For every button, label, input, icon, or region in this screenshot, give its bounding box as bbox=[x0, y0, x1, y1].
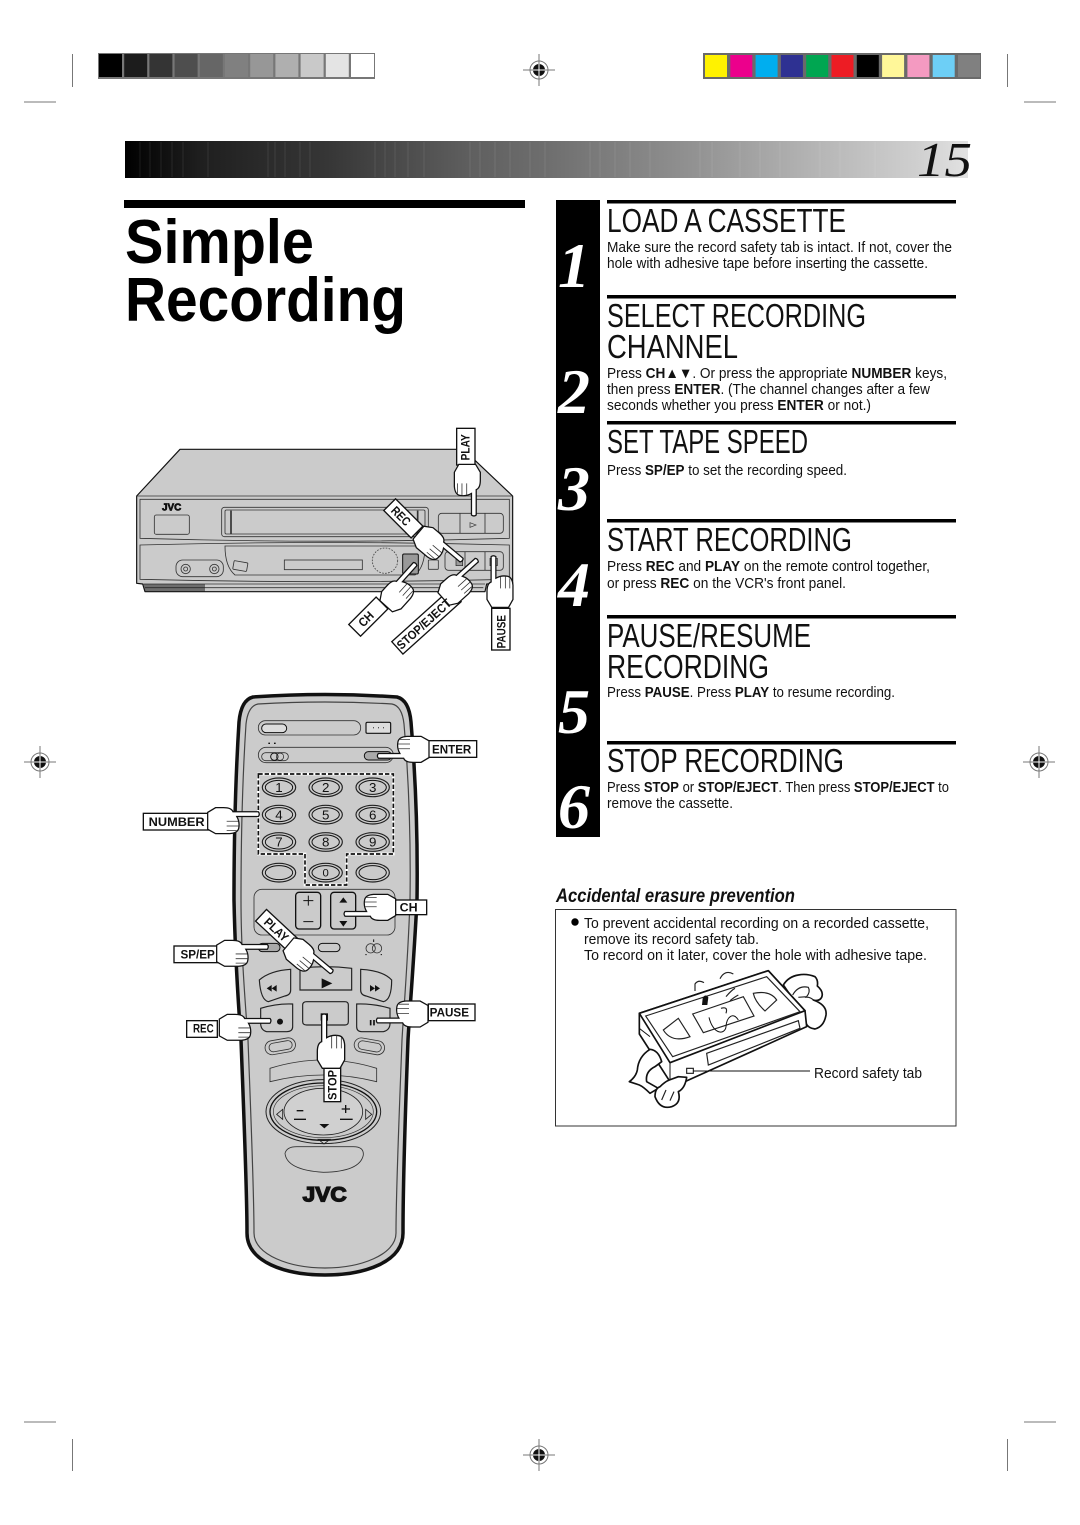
numeric keypad: 8 bbox=[322, 835, 329, 850]
remote lower controls bbox=[187, 1001, 475, 1207]
registration mark: left bbox=[24, 746, 56, 778]
colour calibration bar bbox=[703, 53, 981, 79]
label: CH bbox=[344, 894, 427, 920]
step 5: pause/resume recording: Press PAUSE. Press PLAY to resume recording. bbox=[607, 685, 895, 701]
step 2: select recording channel: CHANNEL bbox=[607, 328, 738, 365]
VCR body: JVC bbox=[162, 503, 181, 514]
step 4: start recording: or press REC on the VCR's front panel. bbox=[607, 576, 846, 592]
numeric keypad: 1 bbox=[275, 780, 283, 795]
label: STOP/EJECT (VCR): STOP/EJECT bbox=[394, 596, 454, 652]
label: NUMBER: NUMBER bbox=[149, 815, 205, 829]
dashed keypad outline bbox=[258, 774, 393, 885]
note text: remove its record safety tab. bbox=[584, 932, 759, 948]
numeric keypad: 7 bbox=[275, 835, 283, 850]
label: ENTER bbox=[377, 736, 477, 762]
note text: To prevent accidental recording on a recorded cassette, bbox=[584, 916, 929, 932]
step numbers: 3 bbox=[557, 453, 590, 524]
step 3: set tape speed: SET TAPE SPEED bbox=[607, 423, 808, 460]
step numbers: 2 bbox=[557, 356, 590, 427]
VCR body bbox=[137, 449, 513, 592]
numeric keypad: 4 bbox=[275, 807, 283, 822]
numeric keypad: 0 bbox=[323, 868, 329, 880]
label: record safety tab: Record safety tab bbox=[814, 1066, 922, 1082]
numeric keypad bbox=[262, 778, 389, 882]
remote hand labels bbox=[143, 736, 477, 987]
registration mark: bottom bbox=[523, 1439, 555, 1471]
step 1: load a cassette: Make sure the record safety tab is intact. If not, cover the bbox=[607, 240, 952, 256]
JVC logo: JVC bbox=[303, 1183, 347, 1207]
label: PAUSE (VCR) bbox=[487, 556, 513, 650]
label: REC (VCR): REC bbox=[388, 504, 413, 529]
step 2: select recording channel: SELECT RECORDING bbox=[607, 297, 866, 334]
illustration: cartoon cassette bbox=[629, 971, 826, 1107]
step 5: pause/resume recording bbox=[607, 615, 956, 701]
label: PLAY (remote) bbox=[256, 909, 336, 987]
step 4: start recording bbox=[607, 519, 956, 592]
label: PAUSE (VCR): PAUSE bbox=[495, 615, 509, 648]
note text bbox=[571, 916, 929, 964]
label: PLAY (remote): PLAY bbox=[261, 915, 292, 945]
header gradient bar bbox=[125, 141, 968, 178]
step 1: load a cassette: hole with adhesive tape before inserting the cassette. bbox=[607, 256, 928, 272]
label: ENTER: ENTER bbox=[432, 742, 471, 756]
step numbers: 1 bbox=[558, 230, 590, 301]
page number: 15 bbox=[917, 132, 972, 187]
record safety tab leader bbox=[693, 1069, 810, 1072]
label: REC (remote) bbox=[187, 1014, 271, 1040]
step numbers: 5 bbox=[558, 676, 590, 747]
label: PAUSE (remote) bbox=[376, 1001, 475, 1027]
step 6: stop recording bbox=[607, 741, 956, 812]
panel: accidental erasure prevention bbox=[556, 910, 956, 1126]
step 6: stop recording: Press STOP or STOP/EJECT. Then press STOP/EJECT to bbox=[607, 780, 949, 796]
step numbers: 4 bbox=[557, 549, 590, 620]
step 2: select recording channel: seconds whether you press ENTER or not.) bbox=[607, 398, 871, 414]
label: STOP/EJECT (VCR) bbox=[392, 555, 491, 654]
numeric keypad: 3 bbox=[369, 780, 376, 795]
label: REC (VCR) bbox=[384, 499, 466, 576]
label: REC (remote): REC bbox=[193, 1022, 214, 1036]
step 1: load a cassette bbox=[607, 200, 956, 272]
direction pad bbox=[266, 1080, 381, 1144]
title bbox=[125, 208, 406, 335]
step 1: load a cassette: LOAD A CASSETTE bbox=[607, 202, 846, 239]
label: CH (VCR): CH bbox=[356, 609, 377, 630]
step 4: start recording: START RECORDING bbox=[607, 521, 852, 558]
step numbers bbox=[557, 230, 590, 842]
remote body bbox=[234, 694, 417, 1275]
label: PLAY (VCR): PLAY bbox=[458, 434, 472, 460]
label: SP/EP bbox=[174, 940, 268, 966]
numeric keypad: 9 bbox=[369, 835, 376, 850]
title: Simple bbox=[125, 208, 314, 277]
step 3: set tape speed: Press SP/EP to set the recording speed. bbox=[607, 463, 847, 479]
note text: To record on it later, cover the hole with adhesive tape. bbox=[584, 948, 927, 964]
illustration: remote control bbox=[143, 694, 477, 1275]
step 2: select recording channel: Press CH▲▼. Or press the appropriate NUMBER keys, bbox=[607, 366, 947, 382]
label: NUMBER bbox=[143, 808, 259, 834]
illustration: VCR with pointing hands bbox=[137, 428, 513, 654]
step 2: select recording channel: then press ENTER. (The channel changes after a few bbox=[607, 382, 930, 398]
step 6: stop recording: remove the cassette. bbox=[607, 796, 733, 812]
step 2: select recording channel bbox=[607, 295, 956, 414]
grayscale calibration bar bbox=[98, 53, 375, 79]
registration mark: top bbox=[523, 54, 555, 86]
label: STOP (remote): STOP bbox=[326, 1070, 340, 1100]
label: STOP (remote) bbox=[317, 1014, 345, 1102]
title rule bbox=[124, 200, 525, 208]
numeric keypad: 2 bbox=[322, 780, 329, 795]
left black step column bbox=[556, 200, 600, 837]
numeric keypad: 6 bbox=[369, 807, 376, 822]
label: PLAY (VCR) bbox=[454, 428, 480, 516]
step 5: pause/resume recording: PAUSE/RESUME bbox=[607, 617, 811, 654]
step 5: pause/resume recording: RECORDING bbox=[607, 648, 769, 685]
registration mark: right bbox=[1023, 746, 1055, 778]
step numbers: 6 bbox=[558, 771, 590, 842]
numeric keypad: 5 bbox=[322, 807, 329, 822]
step 6: stop recording: STOP RECORDING bbox=[607, 742, 844, 779]
remote upper controls bbox=[254, 721, 395, 1002]
label: PAUSE (remote): PAUSE bbox=[430, 1006, 469, 1020]
step 3: set tape speed bbox=[607, 421, 956, 479]
title: Recording bbox=[125, 266, 406, 335]
accidental erasure heading: Accidental erasure prevention bbox=[555, 886, 795, 907]
step 4: start recording: Press REC and PLAY on the remote control together, bbox=[607, 559, 930, 575]
label: CH (VCR) bbox=[349, 559, 430, 636]
label: SP/EP: SP/EP bbox=[180, 948, 215, 962]
label: CH: CH bbox=[400, 901, 418, 915]
